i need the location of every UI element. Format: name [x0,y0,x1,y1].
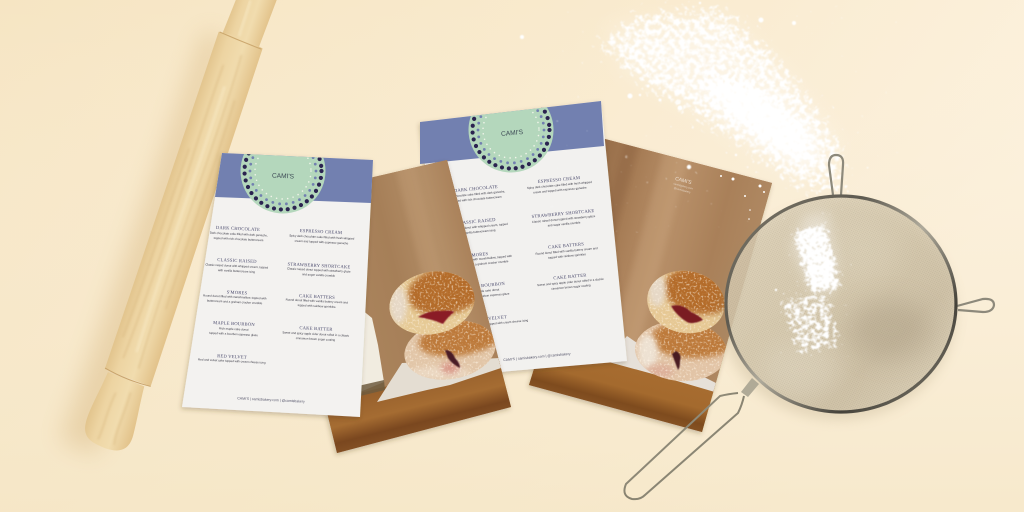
menu item: dark chocolate [447,183,506,204]
menu item: espresso cream: Spicy dark chocolate cake filled with fresh whipped [289,233,355,241]
donut: right upper [647,270,724,334]
flour on mesh [775,212,842,354]
menu item: red velvet: RED VELVET [477,314,507,322]
menu item: dark chocolate: Dark chocolate cake filled with dark ganache, [210,231,268,237]
photo caption: camisbakery.com [673,182,693,191]
photo caption: CAMI'S [674,176,693,186]
wooden board [529,362,714,432]
menu item: strawberry shortcake [287,261,351,279]
menu item: dark chocolate: topped with rich chocolate buttercream [214,236,264,242]
menu item: s'mores [448,249,513,269]
menu item: cake batter: cinnamon brown sugar coating [296,336,336,342]
menu card: left [182,128,373,417]
metal rim [726,196,956,412]
mesh [727,197,955,411]
menu item: maple bourbon: topped with a bourbon espresso glaze [461,291,510,300]
sieve [624,155,994,499]
wooden board [328,359,511,453]
menu item: cake batter [282,324,350,343]
menu item: cake batters [535,240,599,261]
menu item: red velvet: Red and velvet cake topped with cream cheese icing [461,318,529,329]
menu item: s'mores: buttercream and a graham cracker crumble [453,259,509,268]
menu item: espresso cream: ESPRESSO CREAM [538,175,580,184]
menu item: s'mores: S'MORES [467,251,489,258]
menu item: strawberry shortcake: Classic raised donut topped with strawberry glaze [287,266,351,274]
right hanging loop [957,299,994,312]
donut: right lower [635,324,726,382]
menu item: dark chocolate: DARK CHOCOLATE [454,184,498,193]
menu item: maple bourbon: MAPLE BOURBON [463,281,506,290]
menu item: maple bourbon [209,320,259,337]
logo name: CAMI'S [272,172,295,181]
menu item: cake batter: Sweet and spicy apple cider donut rolled in a classic [537,277,604,287]
menu item: maple bourbon: Rich maple cake donut [470,287,500,294]
menu item: cake batters: CAKE BATTERS [548,241,584,250]
sieve shadow [720,204,956,420]
blue header band [420,101,604,164]
menu item: maple bourbon: MAPLE BOURBON [213,320,255,327]
menu item: classic raised [444,216,509,237]
paper under donuts [605,336,720,393]
photo caption [674,176,693,194]
menu item: strawberry shortcake [531,208,596,229]
menu item: s'mores: Round donut filled with marshmallow, topped with [449,254,512,264]
menu item: dark chocolate [209,225,268,242]
rolling pin [60,0,280,456]
card footer: CAMI'S | camisbakery.com | @camisbakery [237,396,305,404]
menu item: espresso cream: Spicy dark chocolate cake filled with fresh whipped [527,180,592,190]
paper under donuts [377,358,501,402]
logo name: CAMI'S [501,129,524,138]
photo card: right, donuts on board [526,139,772,436]
wire handle [624,378,759,499]
menu item: s'mores: buttercream and a graham cracker crumble [207,299,263,305]
card footer: CAMI'S | camisbakery.com | @camisbakery [503,352,571,362]
menu item: cake batter: cinnamon brown sugar coating [551,283,591,291]
menu item: cake batter [536,271,605,292]
menu item: cake batters: topped with rainbow sprinkles [548,252,587,260]
menu item: classic raised: Classic raised donut with whipped cream, topped [445,222,508,232]
menu item: espresso cream [526,174,593,195]
menu item: cake batter: CAKE BATTER [299,325,333,332]
menu item: espresso cream: ESPRESSO CREAM [300,228,342,235]
menu item: strawberry shortcake: STRAWBERRY SHORTCAKE [287,261,351,270]
menu item: classic raised: CLASSIC RAISED [217,257,257,264]
photo caption: @camisbakery [673,186,692,194]
menu item: espresso cream: cream and topped with espresso ganache [533,185,587,194]
menu item: red velvet [198,352,266,365]
menu item: s'mores [203,288,267,305]
menu item: classic raised [205,256,269,275]
menu item: strawberry shortcake: and sugar vanilla crumble [302,272,335,278]
menu item: cake batter: CAKE BATTER [553,272,587,281]
menu item: strawberry shortcake: Classic raised donut topped with strawberry glaze [532,214,596,224]
menu item: cake batter: Sweet and spicy apple cider donut rolled in a classic [282,330,350,338]
menu item: espresso cream: cream and topped with espresso ganache [295,239,349,245]
menu item: classic raised: Classic raised donut with whipped cream, topped [205,262,269,270]
menu item: s'mores: S'MORES [227,289,248,296]
menu card: center [420,88,627,376]
flour specks on photo [720,175,765,220]
menu item: maple bourbon: Rich maple cake donut [219,326,249,332]
menu item: dark chocolate: Dark chocolate cake filled with dark ganache, [447,189,506,199]
menu item: strawberry shortcake: and sugar vanilla crumble [547,220,581,227]
medallion logo [240,154,326,214]
menu item: classic raised: CLASSIC RAISED [456,217,496,226]
menu item: dark chocolate: DARK CHOCOLATE [216,225,260,232]
menu item: espresso cream [289,227,355,246]
menu item: s'mores: Round donut filled with marshmallow, topped with [203,293,267,300]
menu item: red velvet: RED VELVET [217,353,247,360]
menu item: maple bourbon: topped with a bourbon espresso glaze [209,331,258,337]
donut: left lower [404,320,496,380]
donut: left upper [390,271,474,335]
menu item: classic raised: with vanilla buttercream icing [218,268,256,274]
menu item: cake batters [285,292,349,310]
menu item: strawberry shortcake: STRAWBERRY SHORTCAKE [531,208,595,219]
menu item: cake batters: Round donut filled with vanilla buttery cream and [535,246,598,256]
menu item: maple bourbon [459,280,510,300]
top hanging loop [829,155,843,195]
menu item: classic raised: with vanilla buttercream icing [458,228,496,236]
menu item: red velvet [460,312,529,329]
flour pile [520,2,848,195]
photo card: left, donuts on board [324,160,512,456]
medallion logo [468,107,554,172]
menu item: cake batters: Round donut filled with vanilla buttery cream and [286,297,348,305]
menu item: dark chocolate: topped with rich chocolate buttercream [452,195,502,203]
menu item: cake batters: topped with rainbow sprinkles [298,303,336,309]
blue header band [215,153,373,203]
menu item: red velvet: Red and velvet cake topped with cream cheese icing [198,357,266,365]
menu item: cake batters: CAKE BATTERS [299,293,335,300]
glass of milk [362,312,384,392]
